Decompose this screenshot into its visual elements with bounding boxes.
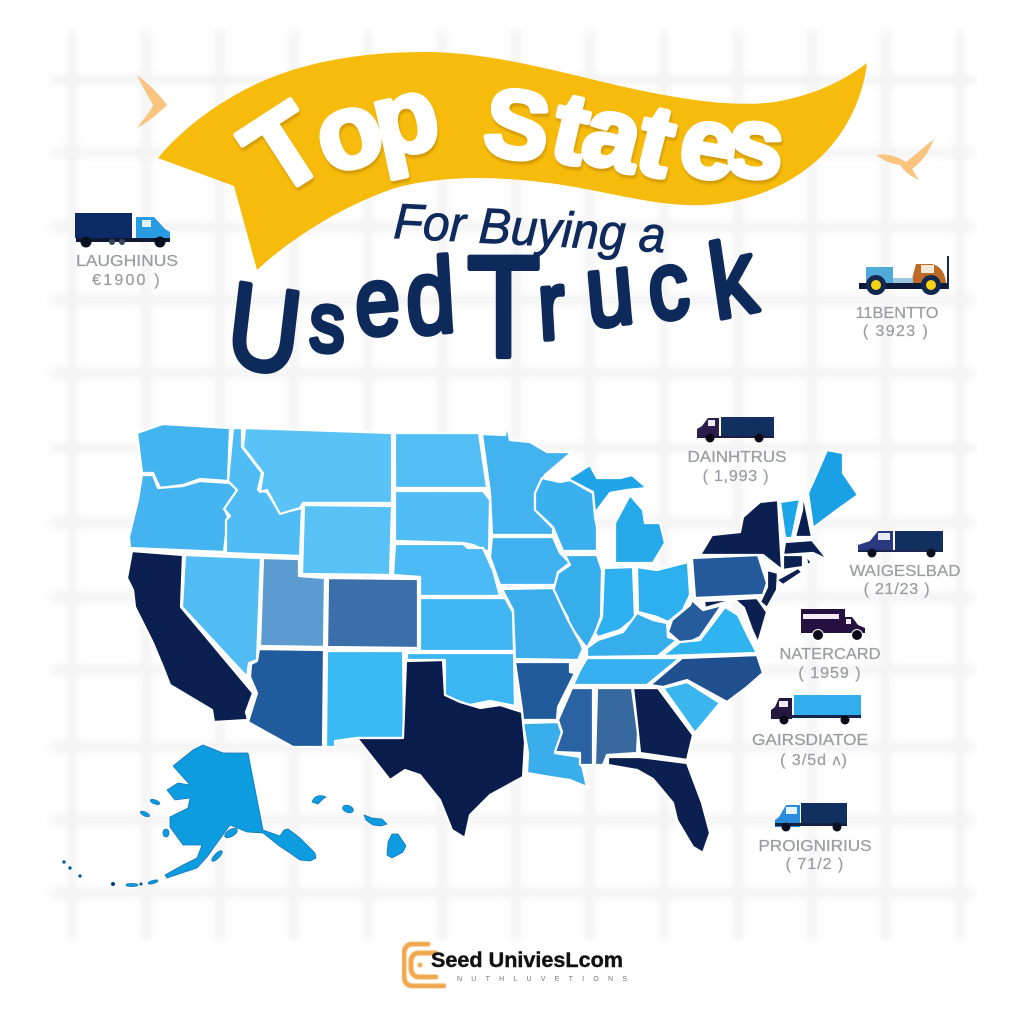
truck callout: Natercard: ( 1959 ): [798, 665, 862, 682]
state: Minnesota: [482, 425, 572, 535]
truck callout: Laughinus: €1900 ): [92, 272, 162, 289]
state: Idaho: [224, 428, 302, 556]
state: Michigan upper: [568, 465, 647, 513]
state: Oklahoma: [407, 653, 515, 706]
icon: truck: [75, 213, 170, 248]
icon: orange e mark: [404, 944, 444, 986]
state: North Dakota: [395, 433, 487, 488]
truck callout: Natercard: [780, 609, 880, 682]
state: Maine: [808, 450, 858, 528]
state: Missouri: [502, 588, 583, 660]
state: New Hampshire: [795, 493, 812, 537]
state: Maryland and Delaware: [704, 598, 767, 643]
state: Iowa: [490, 537, 570, 585]
state: New York: [700, 500, 782, 570]
icon: tractor truck: [859, 256, 949, 295]
decorative orange chevron left: [137, 75, 167, 128]
state: Long Island: [778, 569, 801, 584]
title banner: [0, 0, 867, 270]
state: Connecticut: [783, 555, 803, 570]
icon: box truck: [801, 609, 865, 640]
truck callout: Laughinus: [75, 213, 178, 289]
decorative orange leaf right: [876, 139, 934, 180]
icon: truck: [858, 531, 943, 558]
logo: Seed Univiesl.com: [404, 944, 627, 986]
state: Rhode Island: [806, 555, 812, 565]
truck callout: 11Bentto: 11BENTTO: [856, 305, 938, 322]
state: Illinois: [553, 555, 602, 648]
state: Virginia: [662, 607, 757, 656]
truck callout: Dainhtrus: ( 1,993 ): [703, 468, 769, 485]
state: New Mexico: [326, 651, 404, 747]
state: Colorado: [327, 578, 418, 648]
state: California: [127, 551, 253, 722]
state: Kansas: [420, 598, 514, 651]
state: Massachusetts: [783, 540, 828, 560]
truck callout: Dainhtrus: DAINHTRUS: [688, 449, 786, 466]
state: Washington: [137, 424, 230, 488]
state: Nevada: [182, 555, 261, 677]
map inset: Hawaii: [312, 796, 406, 858]
truck callout: Proignirius: ( 71/2 ): [786, 856, 844, 873]
icon: truck: [775, 803, 847, 832]
truck callout: Waigeslbad: WAIGESLBAD: [850, 563, 960, 580]
state: New Jersey: [760, 570, 778, 608]
truck callout: Waigeslbad: ( 21/23 ): [864, 581, 930, 598]
state: South Carolina: [663, 682, 720, 733]
state: Indiana: [595, 567, 635, 637]
logo: Seed Univiesl.com: Seed UniviesLcom: [431, 949, 623, 972]
state: Arkansas: [515, 662, 575, 720]
state: Louisiana: [523, 722, 587, 787]
state: Georgia: [633, 688, 693, 760]
state: Nebraska: [393, 544, 500, 596]
heading: Used Truck: Used Truck: [0, 0, 763, 401]
map of the United States: [127, 424, 858, 853]
subtitle: For Buying a: For Buying a: [392, 193, 667, 263]
map inset: Alaska: [63, 745, 316, 886]
state: North Carolina: [650, 655, 763, 702]
state: West Virginia: [668, 600, 722, 645]
state: Michigan lower: [615, 495, 665, 563]
state: Utah: [260, 558, 325, 647]
state: Montana: [243, 428, 392, 514]
state: Arizona: [248, 649, 324, 747]
state: Wyoming: [302, 505, 392, 575]
state: Kentucky: [587, 613, 677, 657]
truck callout: 11Bentto: ( 3923 ): [863, 323, 929, 340]
truck callout: 11Bentto: [856, 256, 949, 340]
truck callout: Natercard: NATERCARD: [780, 646, 880, 663]
truck callout: Laughinus: LAUGHINUS: [76, 253, 178, 270]
state: Pennsylvania: [692, 555, 767, 598]
icon: truck: [697, 417, 774, 442]
logo: Seed Univiesl.com: NUTHLUVETIONS: [457, 976, 627, 983]
truck callout: Proignirius: PROIGNIRIUS: [758, 838, 872, 855]
truck callout: Gairsdiatoe: GAIRSDIATOE: [752, 732, 868, 749]
state: Wisconsin: [535, 478, 597, 551]
state: Vermont: [780, 499, 800, 538]
state: Florida: [608, 757, 710, 853]
state: Texas: [357, 660, 525, 838]
truck callout: Dainhtrus: [688, 417, 786, 485]
state: Alabama: [595, 688, 638, 765]
state: Oregon: [129, 475, 237, 552]
state: Mississippi: [555, 688, 593, 765]
state: Ohio: [637, 562, 690, 622]
state: South Dakota: [395, 491, 490, 552]
state: Tennessee: [573, 658, 680, 685]
truck callout: Gairsdiatoe: ( 3/5d ʌ): [780, 752, 848, 769]
truck callout: Proignirius: [758, 803, 872, 873]
icon: truck: [771, 695, 861, 724]
truck callout: Gairsdiatoe: [752, 695, 868, 769]
heading: Top States: Top States: [0, 0, 790, 219]
truck callout: Waigeslbad: [850, 531, 960, 598]
